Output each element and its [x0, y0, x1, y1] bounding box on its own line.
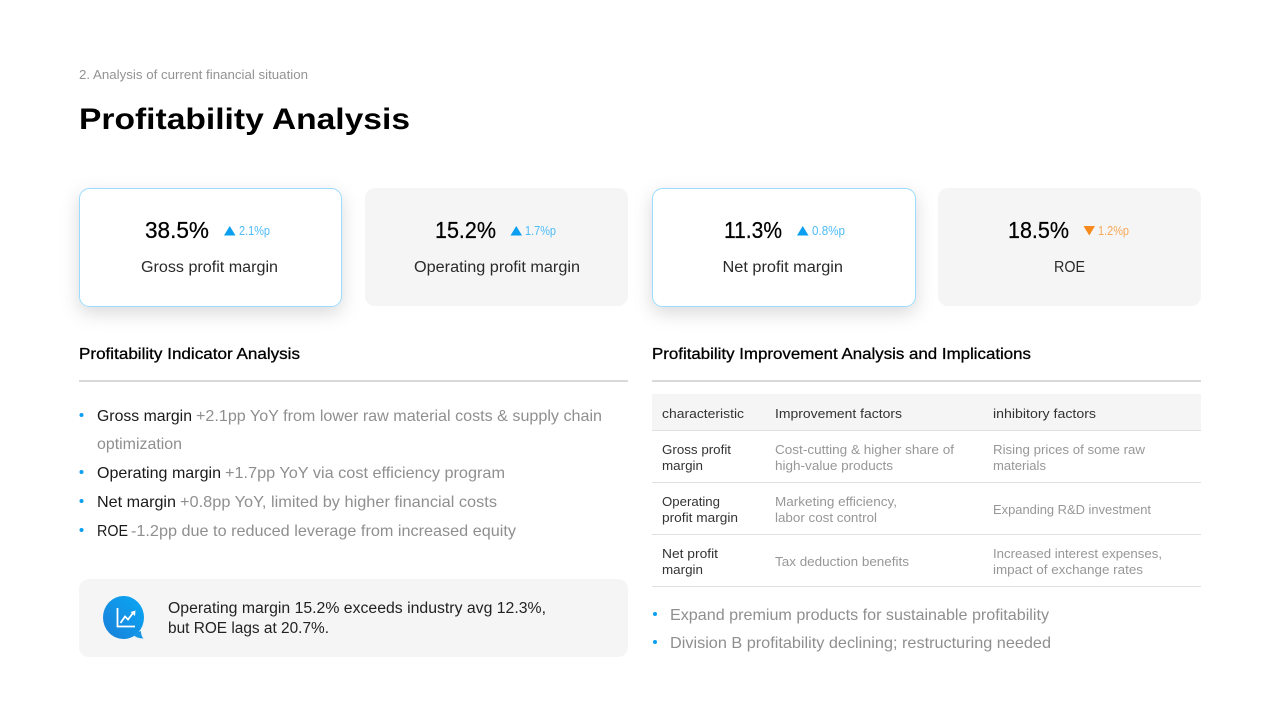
- KPI card: operating profit margin: 1.7%p: [525, 224, 556, 238]
- improvement factors table: high-value products: [775, 458, 894, 473]
- indicator analysis bullet list: Gross margin: [97, 408, 192, 425]
- KPI card: net profit margin: 0.8%p: [812, 224, 845, 238]
- indicator analysis bullet list: Operating margin: [97, 465, 221, 482]
- implications bullet list: Division B profitability declining; restructuring needed: [670, 635, 1051, 652]
- KPI card: gross profit margin: 2.1%p: [239, 224, 270, 238]
- indicator analysis bullet list: ROE: [97, 523, 128, 540]
- heading: indicator analysis: Profitability Indicator Analysis: [79, 346, 300, 363]
- indicator analysis bullet list: +2.1pp YoY from lower raw material costs & supply chain: [196, 408, 602, 425]
- KPI card: operating profit margin: Operating profit margin: [414, 259, 580, 276]
- implications bullet list: Expand premium products for sustainable profitability: [670, 607, 1049, 624]
- improvement factors table: Cost-cutting & higher share of: [775, 442, 954, 457]
- KPI card: gross profit margin: 38.5%: [145, 217, 209, 243]
- improvement factors table: profit margin: [662, 510, 738, 525]
- callout: [79, 579, 628, 657]
- KPI card: ROE: [938, 188, 1201, 306]
- indicator analysis bullet list: -1.2pp due to reduced leverage from increased equity: [131, 523, 516, 540]
- improvement factors table: Expanding R&D investment: [993, 502, 1151, 517]
- improvement factors table: Rising prices of some raw: [993, 442, 1146, 457]
- improvement factors table: margin: [662, 562, 703, 577]
- indicator analysis bullet list: Net margin: [97, 494, 176, 511]
- improvement factors table: Tax deduction benefits: [775, 554, 910, 569]
- indicator analysis bullet list: optimization: [97, 436, 182, 453]
- improvement factors table: Improvement factors: [775, 406, 903, 421]
- improvement factors table: characteristic: [662, 406, 745, 421]
- indicator analysis bullet list: +1.7pp YoY via cost efficiency program: [225, 465, 505, 482]
- improvement factors table: [652, 394, 1201, 587]
- section label: 2. Analysis of current financial situation: [79, 67, 308, 82]
- KPI card: net profit margin: 11.3%: [724, 217, 782, 243]
- KPI card: ROE: ROE: [1054, 259, 1085, 276]
- improvement factors table: impact of exchange rates: [993, 562, 1144, 577]
- improvement factors table: Gross profit: [662, 442, 731, 457]
- improvement factors table: labor cost control: [775, 510, 877, 525]
- KPI card: ROE: 18.5%: [1008, 217, 1069, 243]
- KPI card: net profit margin: [652, 188, 916, 306]
- callout: but ROE lags at 20.7%.: [168, 620, 329, 637]
- heading: improvement analysis: Profitability Improvement Analysis and Implications: [652, 346, 1031, 363]
- KPI card: ROE: 1.2%p: [1098, 224, 1129, 238]
- callout: Operating margin 15.2% exceeds industry avg 12.3%,: [168, 600, 546, 617]
- improvement factors table: Increased interest expenses,: [993, 546, 1162, 561]
- improvement factors table: materials: [993, 458, 1046, 473]
- indicator analysis bullet list: [80, 408, 602, 540]
- icon: chart speech bubble: [103, 596, 144, 639]
- KPI card: gross profit margin: Gross profit margin: [141, 259, 278, 276]
- improvement factors table: inhibitory factors: [993, 406, 1097, 421]
- title: Profitability Analysis: [79, 103, 410, 136]
- KPI card: operating profit margin: 15.2%: [435, 217, 496, 243]
- indicator analysis bullet list: +0.8pp YoY, limited by higher financial costs: [180, 494, 497, 511]
- improvement factors table: Net profit: [662, 546, 718, 561]
- improvement factors table: Marketing efficiency,: [775, 494, 897, 509]
- implications bullet list: [653, 607, 1051, 652]
- KPI card: net profit margin: Net profit margin: [722, 259, 843, 276]
- improvement factors table: Operating: [662, 494, 720, 509]
- KPI card: gross profit margin: [80, 188, 342, 306]
- improvement factors table: margin: [662, 458, 703, 473]
- KPI card: operating profit margin: [365, 188, 628, 306]
